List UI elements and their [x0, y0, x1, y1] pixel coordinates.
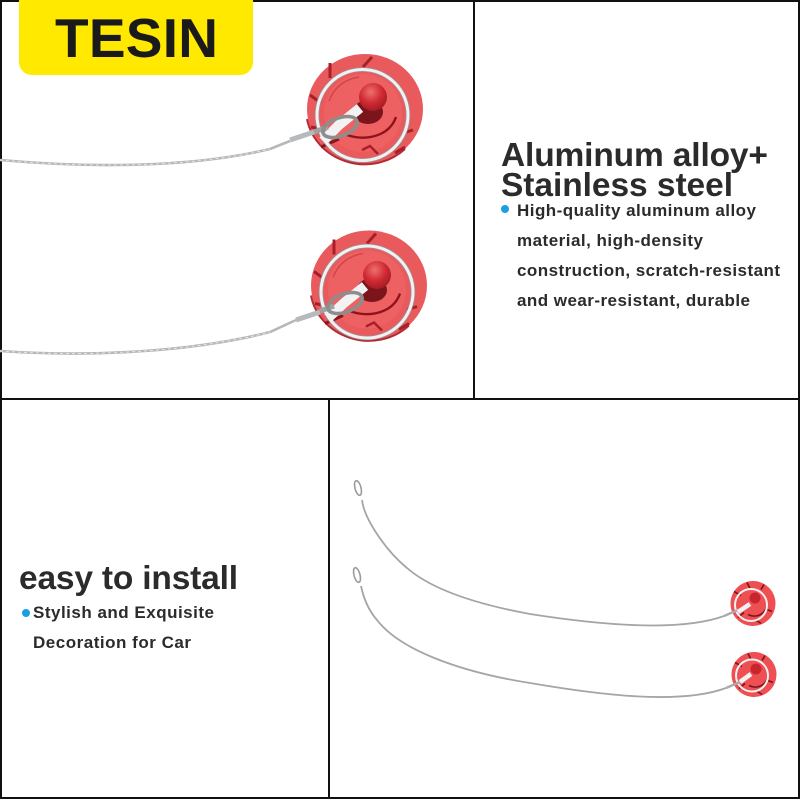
bullet text: install: Stylish and Exquisite	[33, 603, 214, 622]
bullet text: install: Decoration for Car	[33, 633, 191, 652]
photo: lower full cable	[352, 567, 776, 697]
logo: TESIN: TESIN	[55, 7, 218, 69]
heading: material: Stainless steel	[501, 167, 733, 204]
bullet text: material: and wear-resistant, durable	[517, 291, 750, 310]
bullet text: material: material, high-density	[517, 231, 704, 250]
photo: lower hood pin with cable	[0, 230, 427, 354]
logo: TESIN	[19, 0, 253, 75]
bullet text: material: construction, scratch-resistant	[517, 261, 780, 280]
bullet text: material	[501, 201, 780, 310]
photo: upper hood pin with cable	[0, 54, 423, 165]
bullet text: material: High-quality aluminum alloy	[517, 201, 757, 220]
photo: upper full cable	[353, 480, 776, 626]
bullet text: install	[22, 603, 214, 652]
heading: material: Aluminum alloy+	[501, 137, 768, 174]
heading: easy to install: easy to install	[19, 560, 238, 597]
heading: material	[501, 137, 768, 204]
